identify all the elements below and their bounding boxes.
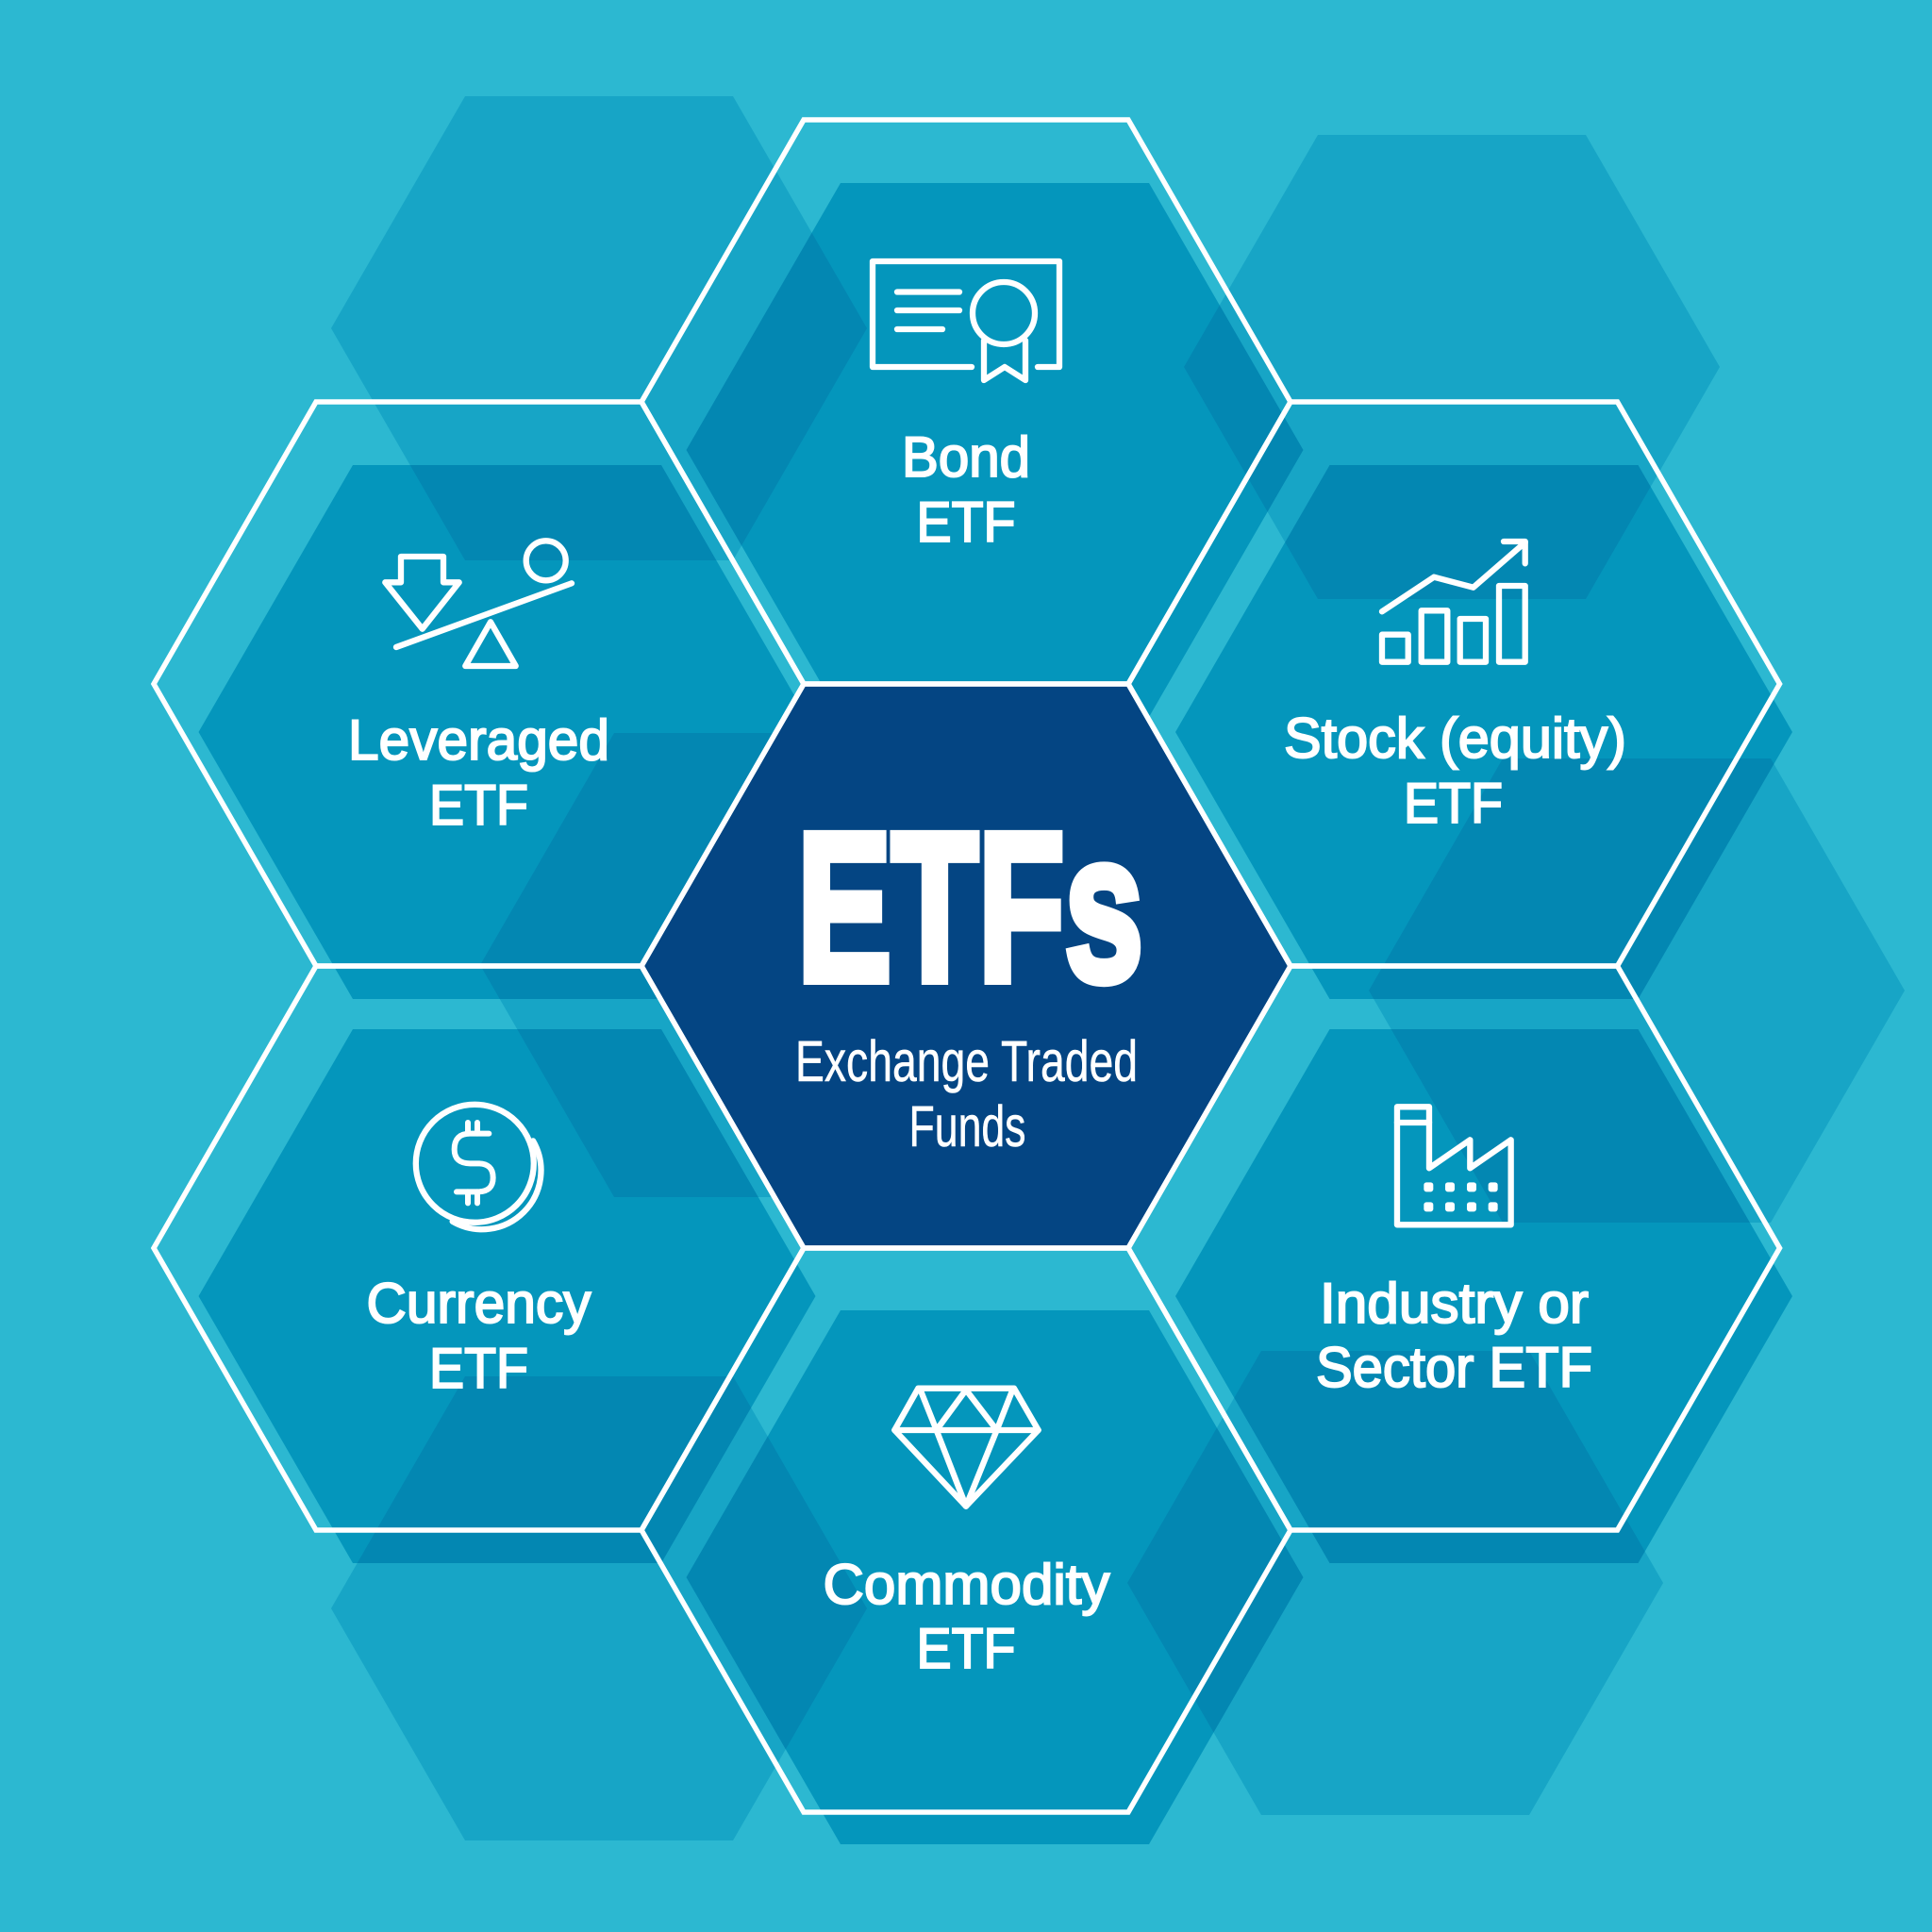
subtitle: Exchange Traded Funds: Funds	[909, 1094, 1026, 1158]
label: Leveraged ETF	[348, 708, 609, 837]
icon: dollar coin	[416, 1105, 541, 1229]
panel: Commodity ETF	[641, 1248, 1291, 1812]
subtitle: Exchange Traded Funds: Exchange Traded	[795, 1029, 1138, 1093]
label: Leveraged ETF: Leveraged	[348, 708, 609, 772]
panel: Bond ETF	[641, 120, 1291, 684]
label: Bond ETF: Bond	[902, 425, 1030, 489]
shaded offset hexagon fills	[198, 183, 1792, 1844]
icon: diamond	[894, 1389, 1039, 1507]
label: Industry or Sector ETF	[1316, 1272, 1592, 1399]
icon: rising bar chart	[1382, 541, 1525, 662]
label: Currency ETF: Currency	[366, 1272, 591, 1335]
label: Currency ETF	[366, 1272, 591, 1400]
label: Commodity ETF	[823, 1553, 1109, 1680]
label: Stock (equity) ETF: Stock (equity)	[1284, 707, 1626, 770]
icon: leverage seesaw	[385, 541, 572, 666]
label: Commodity ETF: ETF	[917, 1617, 1015, 1680]
label: Industry or Sector ETF: Industry or	[1320, 1272, 1589, 1335]
label: Bond ETF: ETF	[917, 491, 1015, 554]
decorative background hexagons	[331, 96, 1905, 1840]
label: Stock (equity) ETF	[1284, 707, 1626, 835]
subtitle: Exchange Traded Funds	[795, 1029, 1138, 1158]
icon: bond certificate	[873, 261, 1059, 380]
panel: Leveraged ETF	[154, 402, 804, 966]
panel: Stock (equity) ETF	[1128, 402, 1779, 966]
panel: Currency ETF	[154, 966, 804, 1530]
label: Industry or Sector ETF: Sector ETF	[1316, 1336, 1592, 1399]
label: Bond ETF	[902, 425, 1030, 554]
icon: factory	[1397, 1107, 1511, 1224]
label: Leveraged ETF: ETF	[429, 774, 528, 837]
label: Stock (equity) ETF: ETF	[1404, 772, 1503, 835]
label: Currency ETF: ETF	[429, 1337, 528, 1400]
panel: Industry or Sector ETF	[1128, 966, 1779, 1530]
panel: centre ETFs	[641, 684, 1291, 1248]
heading: ETFs: ETFs	[797, 790, 1143, 1025]
label: Commodity ETF: Commodity	[823, 1553, 1109, 1616]
